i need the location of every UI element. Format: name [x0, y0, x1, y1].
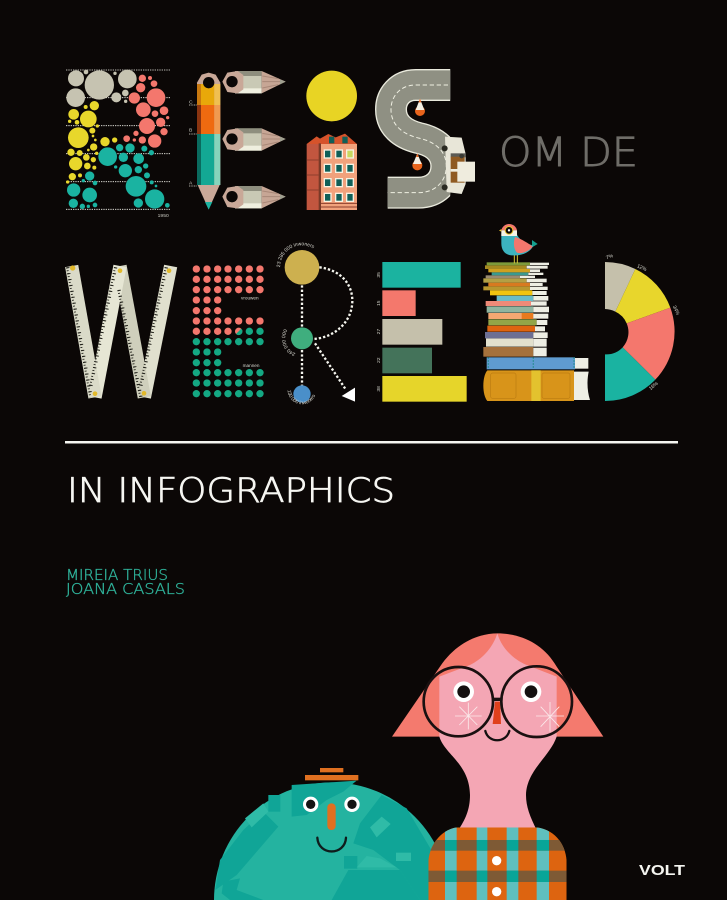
face and neck — [439, 633, 557, 830]
cone — [415, 99, 425, 116]
letter E: dot matrix men and women: mannen — [243, 363, 260, 368]
large pencil: B — [189, 127, 193, 133]
letter E: bar chart: 27 — [376, 329, 382, 334]
hair — [392, 633, 603, 737]
letter R: population flow diagram: 240 000 000 — [282, 329, 296, 356]
letter D: donut chart: 7% — [605, 253, 615, 261]
authors: JOANA CASALS — [66, 580, 185, 598]
letter R: population flow diagram: 130 000 inwoners — [288, 390, 315, 404]
letter R: population flow diagram — [276, 242, 355, 404]
letter R: bubble chart — [66, 70, 170, 219]
letter E: bar chart: 35 — [376, 272, 382, 278]
van — [442, 137, 475, 194]
subtitle: IN INFOGRAPHICS — [67, 471, 395, 510]
letter D: donut chart — [605, 253, 681, 401]
small pencils — [222, 71, 286, 208]
letter E: bar chart: 15 — [376, 300, 382, 306]
shirt — [428, 827, 567, 900]
letter R: bubble chart: 1950 — [158, 213, 169, 219]
glasses — [424, 666, 572, 737]
smile — [485, 731, 509, 740]
letter D: donut chart: 16% — [648, 380, 660, 392]
letter E: bar chart — [376, 262, 467, 402]
book cover — [65, 69, 685, 900]
large pencil: C — [189, 100, 193, 106]
letter D: donut chart: 12% — [636, 263, 648, 273]
large pencil — [189, 73, 220, 210]
heading: om de: OM DE — [499, 130, 638, 176]
letter D: donut chart: 34% — [671, 305, 681, 317]
hat — [305, 768, 358, 780]
publisher logo: VOLT — [639, 862, 685, 879]
letter E: dot matrix men and women: vrouwen — [241, 296, 259, 301]
large pencil: A — [189, 180, 193, 186]
nose — [493, 702, 501, 724]
authors — [66, 566, 185, 598]
cone — [412, 153, 422, 170]
letter E: bar chart: 22 — [376, 357, 382, 363]
letter E: dot matrix men and women — [193, 265, 264, 397]
letter E: bar chart: 38 — [376, 386, 382, 392]
face — [303, 797, 360, 851]
globe character — [214, 768, 449, 900]
letter S: road with van and cones — [382, 85, 475, 194]
building — [307, 134, 357, 210]
letter E: pencils — [189, 71, 286, 210]
letter R: population flow diagram: 23 285 000 inwoners — [276, 242, 314, 268]
authors: MIREIA TRIUS — [66, 566, 168, 584]
letter I: sun and building — [306, 71, 357, 210]
sparkles — [455, 702, 564, 732]
letter L: stack of books — [483, 262, 590, 401]
divider rule — [65, 441, 678, 444]
icon: bird — [499, 224, 538, 263]
letter W: folding ruler — [67, 265, 171, 397]
sun — [306, 71, 357, 121]
eyes — [453, 681, 541, 702]
woman character — [392, 633, 603, 900]
